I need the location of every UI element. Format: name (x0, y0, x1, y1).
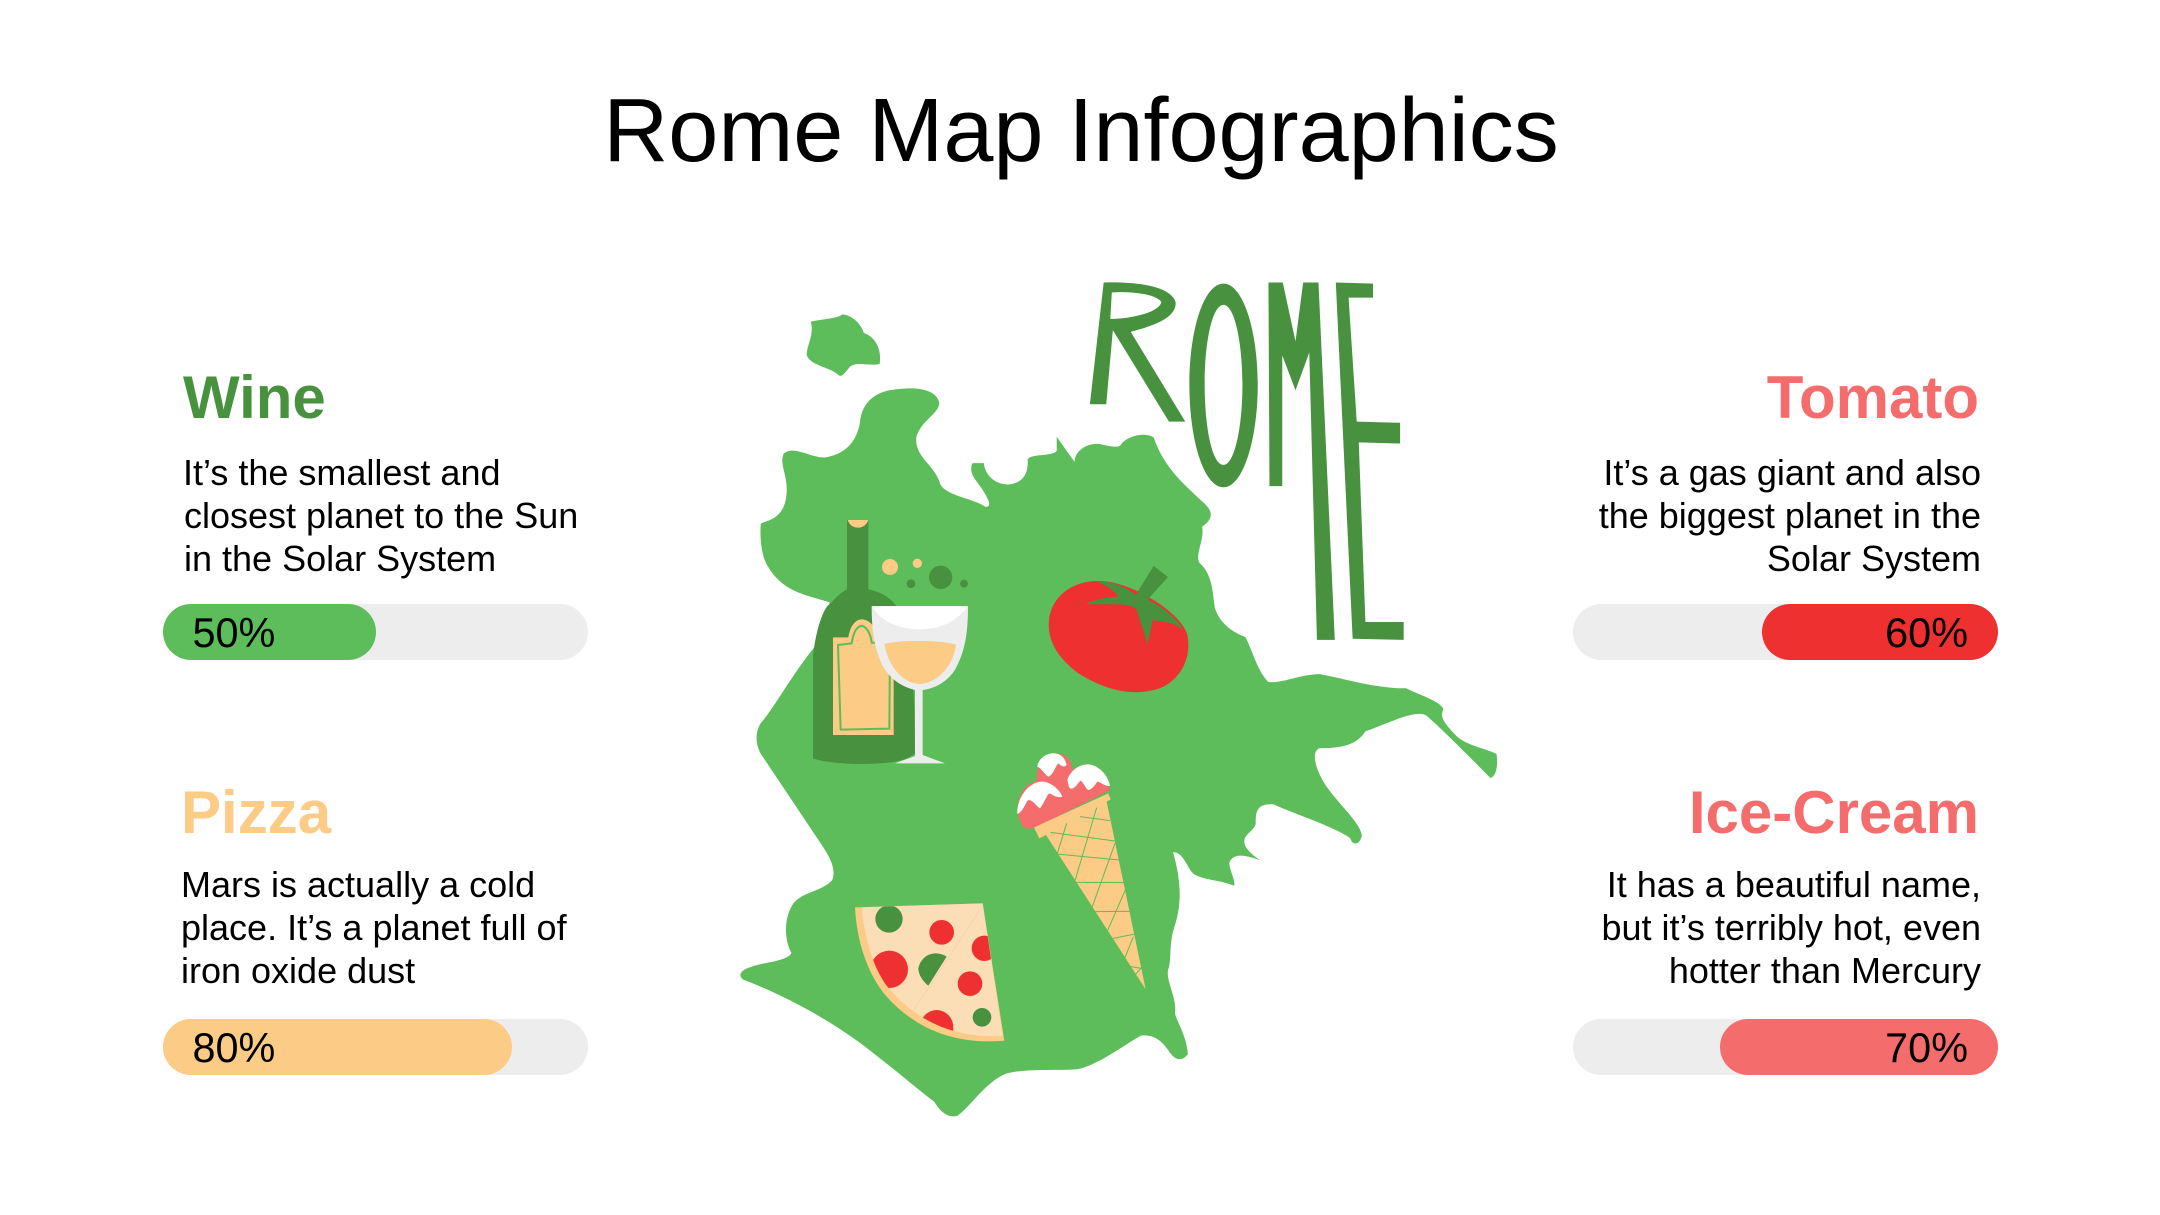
progress bar: tomato 60% (1573, 604, 1998, 660)
progress bar: wine 50% (163, 604, 588, 660)
icon: pizza slice (855, 903, 1004, 1045)
progress bar: wine 50%: 50% (192, 610, 275, 656)
progress bar: ice-cream 70% (1573, 1019, 1998, 1075)
text block: tomato: Solar System (1767, 538, 1981, 579)
text block: wine: It’s the smallest and (183, 452, 500, 493)
icon: ice-cream cone (1017, 753, 1146, 989)
heading: pizza: Pizza (181, 779, 332, 846)
text block: tomato: the biggest planet in the (1599, 495, 1981, 536)
heading: ice-cream: Ice-Cream (1689, 779, 1979, 846)
icon: tomato (1049, 566, 1188, 692)
icon: wine bottle and glass (813, 520, 968, 764)
text block: tomato (1599, 452, 1981, 579)
panel: tomato (1573, 364, 1998, 660)
text block: tomato: It’s a gas giant and also (1603, 452, 1981, 493)
bottle (813, 520, 915, 764)
map of Rome (740, 282, 1497, 1116)
text block: pizza: iron oxide dust (181, 950, 415, 991)
text block: ice-cream: hotter than Mercury (1669, 950, 1981, 991)
progress bar: pizza 80% (163, 1019, 588, 1075)
food icons (855, 753, 1146, 1045)
text block: ice-cream: but it’s terribly hot, even (1601, 907, 1981, 948)
text block: wine: in the Solar System (184, 538, 496, 579)
progress bar: ice-cream 70%: 70% (1885, 1025, 1968, 1071)
progress bar: tomato 60%: 60% (1885, 610, 1968, 656)
bubbles (882, 559, 968, 589)
heading: tomato: Tomato (1767, 364, 1979, 431)
panel: wine (163, 364, 588, 660)
text block: ice-cream: It has a beautiful name, (1607, 864, 1981, 905)
text block: ice-cream (1601, 864, 1981, 991)
text block: wine: closest planet to the Sun (184, 495, 578, 536)
map: main region (740, 388, 1497, 1116)
lettering: ROME (1090, 282, 1404, 640)
text block: pizza: place. It’s a planet full of (181, 907, 568, 948)
panel: ice-cream (1573, 779, 1998, 1075)
map: island (807, 314, 880, 376)
glass (872, 606, 968, 763)
panel: pizza (163, 779, 588, 1075)
heading: wine: Wine (183, 364, 326, 431)
text block: wine (183, 452, 578, 579)
progress bar: pizza 80%: 80% (192, 1025, 275, 1071)
text block: pizza (181, 864, 568, 991)
title: Rome Map Infographics (603, 81, 1559, 181)
text block: pizza: Mars is actually a cold (181, 864, 535, 905)
